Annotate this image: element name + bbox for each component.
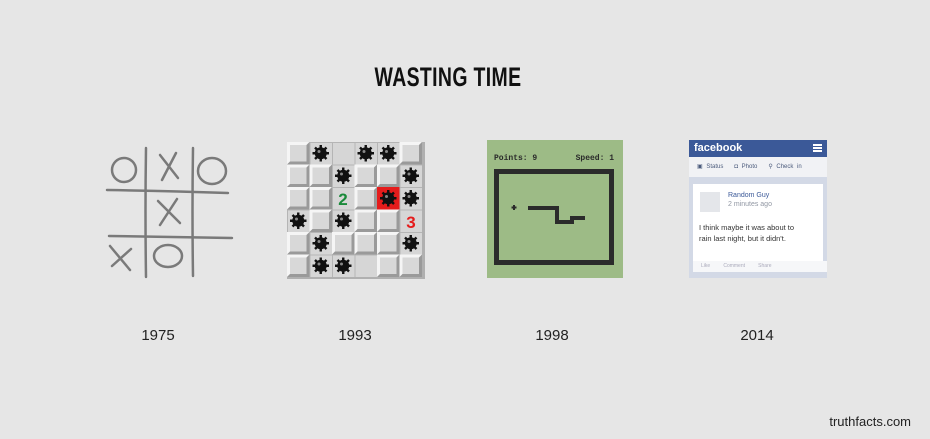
title: WASTING TIME bbox=[375, 62, 521, 92]
icon: snake game: Points: 9 bbox=[494, 154, 537, 163]
icon: facebook post: I think maybe it was about to rain last night, but it didn't. bbox=[699, 223, 794, 243]
icon: snake game: Speed: 1 bbox=[576, 154, 614, 163]
icon: minesweeper: 2 bbox=[338, 190, 348, 209]
icon: tic tac toe bbox=[106, 146, 234, 278]
text: 1993 bbox=[338, 327, 372, 344]
icon: snake game bbox=[487, 140, 623, 278]
footer credit: truthfacts.com bbox=[829, 414, 911, 429]
icon: minesweeper bbox=[287, 142, 425, 279]
text: 1998 bbox=[535, 327, 569, 344]
icon: facebook post: facebook bbox=[694, 142, 742, 154]
icon: facebook post: ▣ Status ◘ Photo ⚲ Check in bbox=[697, 164, 802, 170]
text: 2014 bbox=[740, 327, 774, 344]
icon: facebook post: Like Comment Share bbox=[701, 263, 772, 269]
icon: facebook post bbox=[689, 140, 827, 278]
icon: minesweeper: 3 bbox=[406, 213, 416, 232]
year labels: 1975 bbox=[141, 327, 175, 344]
icon: facebook post: Random Guy bbox=[728, 192, 769, 199]
icon: facebook post: 2 minutes ago bbox=[728, 201, 772, 208]
